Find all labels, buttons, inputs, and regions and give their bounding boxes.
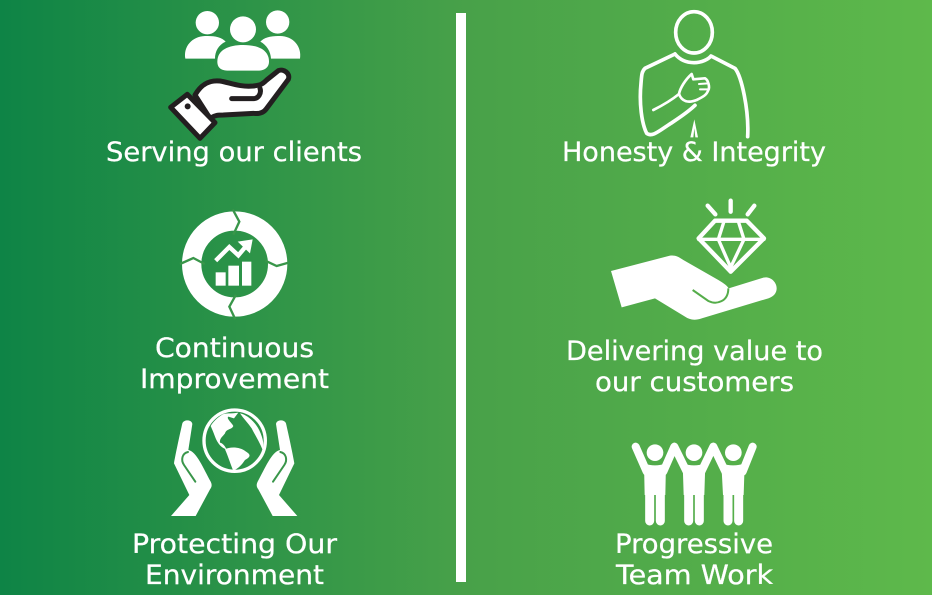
- label: Continuous Improvement: [140, 333, 329, 395]
- label: Serving our clients: Serving our clients: [106, 137, 362, 168]
- label: Protecting Our Environment: Protecting Our: [132, 529, 337, 560]
- label: Continuous Improvement: Continuous: [155, 333, 314, 364]
- icon: hand holding people: [171, 10, 300, 138]
- label: Delivering value to our customers: our customers: [595, 367, 794, 398]
- icon: person with hand on heart: [640, 12, 748, 137]
- label: Protecting Our Environment: [132, 529, 337, 591]
- label: Delivering value to our customers: [566, 336, 823, 398]
- icon: hands holding globe: [171, 410, 297, 516]
- label: Honesty & Integrity: Honesty & Integrity: [562, 137, 826, 168]
- label: Protecting Our Environment: Environment: [145, 560, 324, 591]
- icon: hand offering diamond: [611, 201, 777, 320]
- icon: improvement cycle with growth chart: [180, 209, 289, 319]
- label: Progressive Team Work: Progressive: [615, 529, 773, 560]
- label: Progressive Team Work: [615, 529, 774, 591]
- icon: three people team with raised arms: [636, 444, 753, 521]
- label: Continuous Improvement: Improvement: [140, 364, 329, 395]
- label: Delivering value to our customers: Delivering value to: [566, 336, 823, 367]
- central divider: [456, 13, 466, 582]
- label: Progressive Team Work: Team Work: [615, 560, 774, 591]
